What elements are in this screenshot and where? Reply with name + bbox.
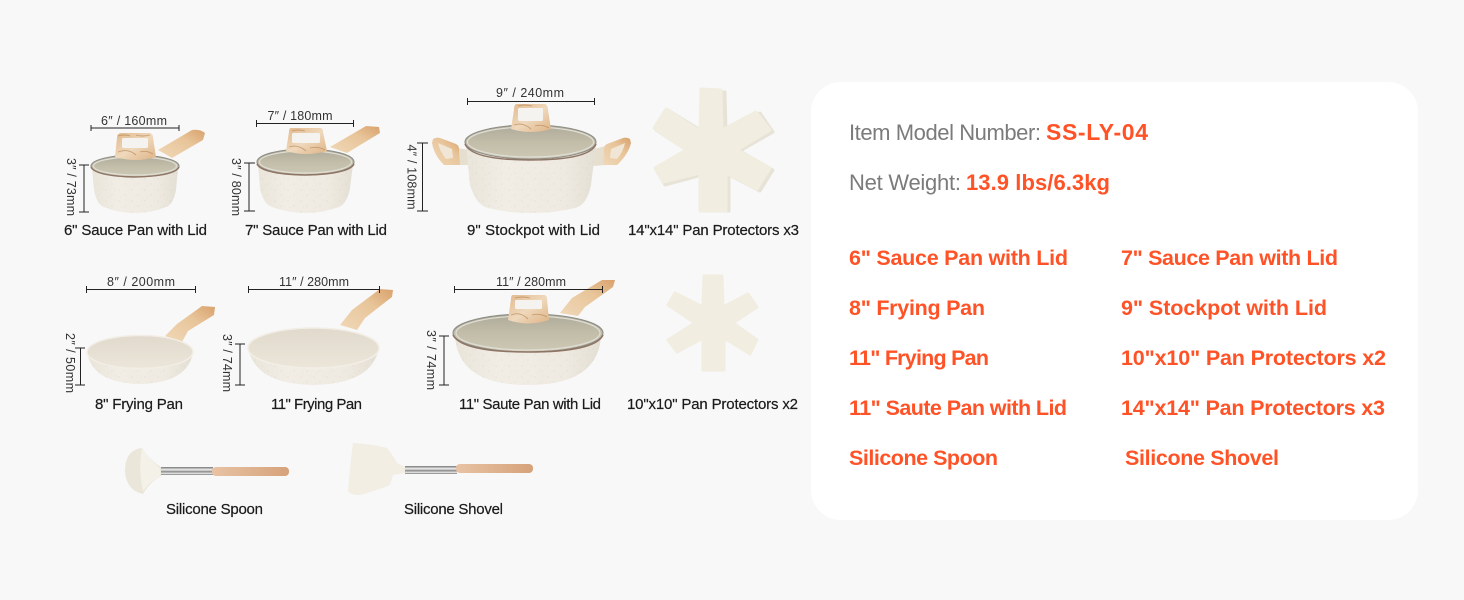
product: 8 inch frying pan [63,275,215,413]
product: silicone shovel [348,443,533,518]
width dimension [86,275,196,293]
height dimension: 3″ / 73mm [64,158,78,216]
net weight: 13.9 lbs/6.3kg [966,170,1110,195]
panel: specifications [811,82,1418,520]
contents list: Silicone Spoon [849,446,998,470]
net weight: Net Weight: [849,170,961,195]
icon: saute pan [453,280,615,385]
width dimension [256,109,354,127]
label: 10"x10" Pan Protectors x2 [627,396,798,413]
icon: small pan protector [668,276,757,370]
contents list: Silicone Shovel [1125,446,1279,470]
icon: spoon [125,448,289,494]
width dimension: 11″ / 280mm [496,275,566,289]
icon: large pan protector [654,89,773,211]
label: 11" Frying Pan [271,396,362,413]
height dimension: 4″ / 108mm [404,144,418,210]
icon: 8 inch frying pan [87,306,215,384]
product: 11 inch saute pan with lid [424,275,615,413]
icon: 7 inch sauce pan [257,126,380,213]
contents list: 10"x10" Pan Protectors x2 [1121,346,1386,370]
icon: 6 inch sauce pan [91,130,205,213]
contents list [849,246,1386,470]
width dimension: 8″ / 200mm [107,275,175,289]
label: 7" Sauce Pan with Lid [245,222,387,239]
icon: shovel [348,443,533,495]
height dimension: 3″ / 74mm [424,330,438,390]
icon: 11 inch frying pan [248,289,393,385]
contents list: 6" Sauce Pan with Lid [849,246,1068,270]
icon: stockpot [432,104,631,213]
height dimension [64,158,89,216]
label: 6" Sauce Pan with Lid [64,222,207,239]
item model number: SS-LY-04 [1046,119,1148,145]
height dimension [229,158,255,216]
height dimension: 3″ / 74mm [220,334,234,392]
width dimension: 6″ / 160mm [101,114,167,128]
contents list: 11" Frying Pan [849,346,989,370]
label: Silicone Shovel [404,501,503,518]
height dimension [424,330,449,390]
width dimension [248,275,380,293]
width dimension [454,275,602,293]
net weight [849,170,1110,195]
height dimension: 2″ / 50mm [63,333,77,393]
product: 6 inch sauce pan with lid [64,114,207,239]
height dimension: 3″ / 80mm [229,158,243,216]
product: 7 inch sauce pan with lid [229,109,387,239]
item model number: Item Model Number: [849,120,1041,145]
product: silicone spoon [125,448,289,518]
product: 10 inch pan protectors [627,276,798,413]
item model number [849,119,1148,145]
label: 11" Saute Pan with Lid [459,396,601,413]
height dimension [63,333,85,393]
contents list: 8" Frying Pan [849,296,985,320]
label: 9" Stockpot with Lid [467,222,600,239]
width dimension [91,114,179,131]
product: 9 inch stockpot with lid [404,86,631,239]
width dimension: 7″ / 180mm [268,109,332,123]
width dimension [468,86,594,105]
product: 14 inch pan protectors [628,89,799,239]
contents list: 7" Sauce Pan with Lid [1121,246,1338,270]
height dimension [220,334,245,392]
label: 14"x14" Pan Protectors x3 [628,222,799,239]
height dimension [404,143,428,211]
width dimension: 9″ / 240mm [496,86,564,100]
contents list: 14"x14" Pan Protectors x3 [1121,396,1385,420]
product: 11 inch frying pan [220,275,393,413]
label: Silicone Spoon [166,501,263,518]
label: 8" Frying Pan [95,396,183,413]
contents list: 9" Stockpot with Lid [1121,296,1327,320]
width dimension: 11″ / 280mm [279,275,349,289]
contents list: 11" Saute Pan with Lid [849,396,1067,420]
